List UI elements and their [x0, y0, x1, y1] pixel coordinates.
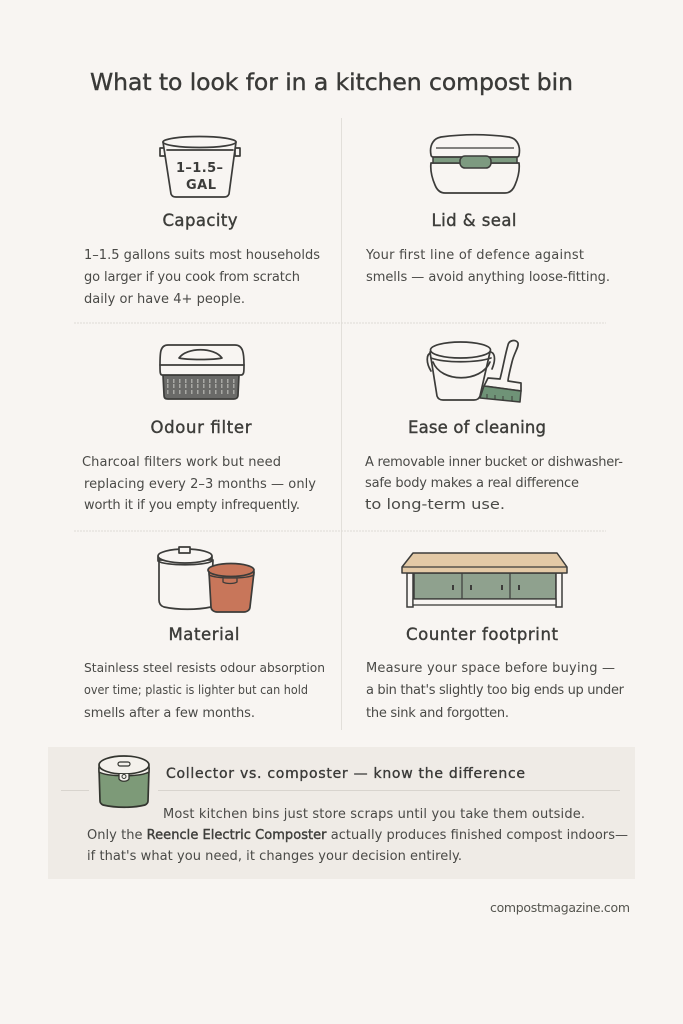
- text: odour filter body: worth it if you empty infrequently.: [84, 498, 300, 513]
- icon: counter cabinet: [402, 553, 567, 607]
- text: material body: Stainless steel resists odour absorption: [84, 660, 325, 675]
- text: odour filter body: [82, 455, 316, 513]
- callout heading: Collector vs. composter — know the difference: [166, 766, 525, 782]
- text: ease of cleaning body: to long-term use.: [365, 497, 505, 513]
- text: lid and seal body: [365, 248, 610, 285]
- icon: capacity bucket: 1–1.5–: [176, 161, 223, 176]
- icon: capacity bucket: [160, 136, 240, 197]
- text: capacity body: daily or have 4+ people.: [84, 292, 245, 307]
- panel: odour filter: [82, 345, 316, 513]
- icon: capacity bucket: GAL: [186, 178, 216, 193]
- callout: collector vs composter: [48, 747, 635, 879]
- panel: ease of cleaning: [365, 341, 623, 513]
- text: counter footprint body: a bin that's slightly too big ends up under: [366, 683, 625, 698]
- text: ease of cleaning body: A removable inner bucket or dishwasher-: [365, 455, 623, 470]
- panel: material: [84, 547, 325, 721]
- text: odour filter body: Charcoal filters work but need: [82, 455, 281, 470]
- text: lid and seal body: smells — avoid anything loose-fitting.: [366, 270, 610, 285]
- heading: lid and seal: Lid & seal: [432, 211, 516, 230]
- text: lid and seal body: Your first line of defence against: [365, 248, 584, 263]
- source credit: compostmagazine.com: [490, 900, 630, 915]
- icon: two material bins: [158, 547, 254, 612]
- text: capacity body: [84, 248, 320, 307]
- panel: lid and seal: [365, 135, 610, 285]
- heading: counter footprint: Counter footprint: [406, 625, 559, 644]
- text: odour filter body: replacing every 2–3 months — only: [84, 477, 316, 492]
- heading: ease of cleaning: Ease of cleaning: [408, 418, 546, 437]
- icon: lid container: [431, 135, 519, 193]
- text: capacity body: 1–1.5 gallons suits most households: [84, 248, 320, 263]
- callout body: Most kitchen bins just store scraps until you take them outside.: [163, 807, 585, 822]
- text: material body: smells after a few months.: [84, 706, 255, 721]
- heading: capacity: Capacity: [162, 211, 238, 230]
- text: counter footprint body: Measure your space before buying —: [366, 661, 615, 676]
- text: material body: over time; plastic is lighter but can hold: [84, 682, 308, 697]
- icon: bucket and brush: [427, 341, 521, 402]
- heading: material: Material: [168, 625, 240, 644]
- text: ease of cleaning body: safe body makes a real difference: [365, 476, 579, 491]
- callout body: Only the Reencle Electric Composter actually produces finished compost indoors—: [87, 828, 628, 843]
- panel: counter footprint: [366, 553, 625, 721]
- text: ease of cleaning body: [365, 455, 623, 513]
- icon: filter bin: [160, 345, 244, 399]
- title: What to look for in a kitchen compost bin: [90, 68, 573, 96]
- text: material body: [84, 660, 325, 721]
- heading: odour filter: Odour filter: [150, 418, 252, 437]
- callout body: if that's what you need, it changes your decision entirely.: [87, 849, 462, 864]
- panel: capacity: [84, 136, 320, 307]
- text: counter footprint body: the sink and forgotten.: [366, 706, 509, 721]
- callout body: [87, 807, 628, 864]
- text: counter footprint body: [366, 661, 625, 721]
- icon: green compost bin: [99, 756, 149, 807]
- text: capacity body: go larger if you cook from scratch: [84, 270, 300, 285]
